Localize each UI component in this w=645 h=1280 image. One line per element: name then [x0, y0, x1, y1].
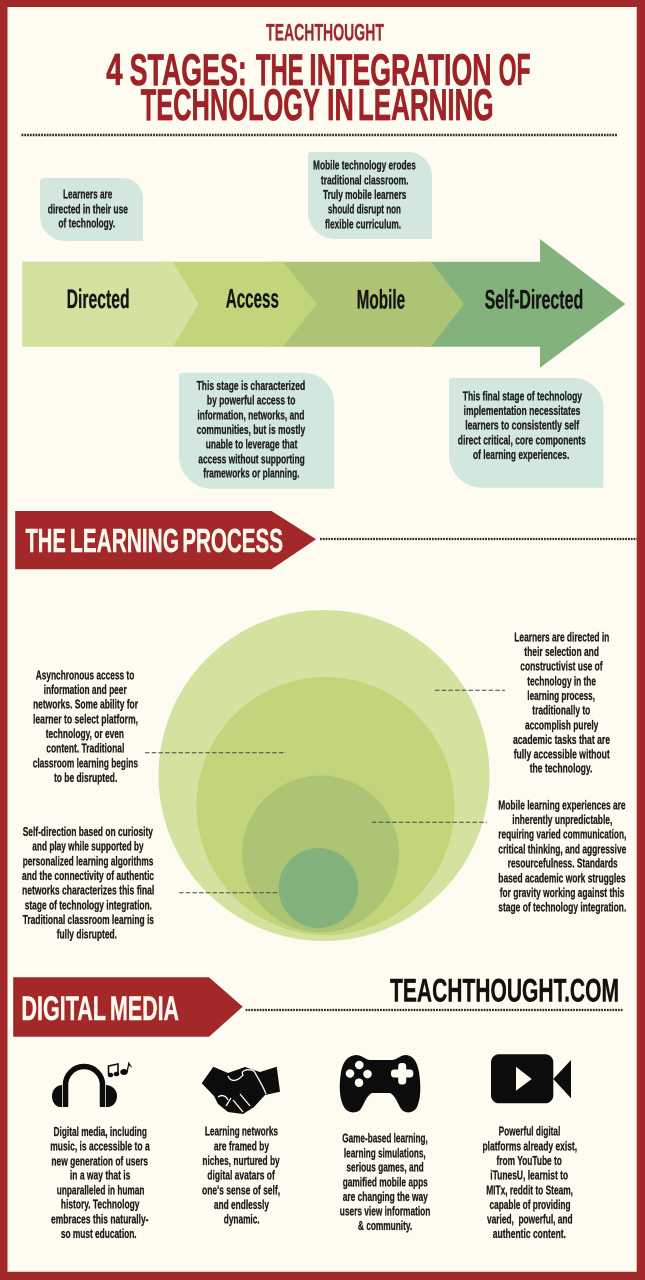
text: asynchronous access: technology, or even [46, 727, 124, 741]
callout: directed [40, 178, 143, 241]
text: asynchronous access: Asynchronous access to [36, 668, 135, 682]
title [106, 46, 531, 130]
text: learners directed: the technology. [530, 762, 592, 776]
text: mobile learning [498, 798, 626, 915]
callout: mobile: traditional classroom. [321, 173, 408, 187]
text: learners directed: technology in the [527, 674, 596, 688]
text: self-direction: and play while supported by [32, 840, 144, 854]
text: digital platforms: authentic content. [493, 1227, 566, 1241]
text: self-direction: personalized learning algorithms [23, 854, 153, 868]
text: self-direction: networks characterizes this final [22, 884, 154, 898]
text: learners directed: learning process, [527, 689, 595, 703]
callout: self-directed: learners to consistently self [465, 419, 580, 433]
text: digital platforms [482, 1125, 577, 1241]
circle: access [196, 677, 454, 935]
section banner: digital media [13, 977, 243, 1037]
text: learning networks [202, 1125, 280, 1226]
callout: access: information, networks, and [197, 408, 304, 422]
text: digital media [50, 1125, 150, 1241]
title: LEARNING [358, 81, 494, 130]
stage labels: Mobile [357, 285, 405, 315]
text: self-direction: and the connectivity of authentic [22, 869, 154, 883]
callout: mobile: Truly mobile learners [323, 188, 406, 202]
callout: access: frameworks or planning. [203, 467, 300, 481]
text: learning networks: are framed by [214, 1139, 269, 1153]
circle: mobile [242, 776, 399, 932]
title: OF [499, 46, 531, 95]
callout: directed: of technology. [58, 217, 115, 231]
title: 4 [106, 46, 123, 95]
text: digital platforms: capable of providing [490, 1198, 570, 1212]
text: asynchronous access: learner to select platform, [33, 712, 138, 726]
text: digital media: in a way that is [70, 1169, 130, 1183]
text: learners directed: accomplish purely [525, 718, 598, 732]
text: digital media: new generation of users [51, 1154, 148, 1168]
callout: self-directed: of learning experiences. [473, 448, 569, 462]
text: digital platforms: Powerful digital [499, 1125, 560, 1139]
text: game-based learning: users view information [340, 1204, 430, 1218]
text: digital media: Digital media, including [54, 1125, 147, 1139]
callout: access: communities, but is mostly [197, 423, 305, 437]
title: TECHNOLOGY [141, 81, 320, 130]
callout: self-directed [449, 378, 604, 488]
text: learners directed: their selection and [524, 645, 599, 659]
text: digital media: unparalleled in human [57, 1183, 144, 1197]
arrow segment: mobile [270, 262, 464, 347]
text: digital platforms: varied, powerful, and [487, 1212, 573, 1226]
arrow segment: access [160, 262, 317, 347]
text: game-based learning: learning simulations, [344, 1146, 426, 1160]
stage arrow [22, 239, 625, 368]
text: learning networks: one's sense of self, [202, 1183, 280, 1197]
brand heading: TEACHTHOUGHT [266, 20, 384, 46]
text: asynchronous access: to be disrupted. [54, 771, 117, 785]
callout: access: This stage is characterized [197, 379, 305, 393]
text: asynchronous access [33, 668, 138, 785]
section banner: the learning process: THE [26, 522, 66, 559]
icon: video camera [491, 1054, 571, 1103]
section banner: digital media: MEDIA [110, 990, 179, 1028]
section banner: the learning process: LEARNING [70, 522, 179, 559]
text: game-based learning: gamified mobile apps [343, 1175, 428, 1189]
callout: self-directed: implementation necessitates [464, 404, 580, 418]
icon: game controller [340, 1055, 420, 1112]
text: learning networks: and endlessly [214, 1198, 269, 1212]
callout: mobile: flexible curriculum. [325, 217, 401, 231]
text: digital media: embraces this naturally- [51, 1212, 148, 1226]
callout: mobile: should disrupt non [328, 203, 401, 217]
text: digital media: history. Technology [61, 1198, 139, 1212]
text: digital media: music, is accessible to a [50, 1140, 150, 1154]
title: IN [327, 81, 354, 130]
text: asynchronous access: networks. Some ability for [33, 698, 138, 712]
text: asynchronous access: information and peer [44, 683, 127, 697]
text: learning networks: niches, nurtured by [202, 1154, 280, 1168]
text: digital platforms: from YouTube to [496, 1154, 562, 1168]
callout: access: access without supporting [198, 452, 305, 466]
text: self-direction: stage of technology integration. [25, 898, 152, 912]
text: digital media: so must education. [61, 1227, 137, 1241]
callout: access [179, 373, 334, 489]
callout: access: by powerful access to [207, 394, 296, 408]
text: digital platforms: iTunesU, learnist to [490, 1169, 568, 1183]
callout: self-directed: direct critical, core components [458, 433, 586, 447]
text: game-based learning: serious games, and [346, 1161, 424, 1175]
callout: directed: Learners are [63, 188, 112, 202]
arrow segment: directed [22, 262, 199, 347]
nested circles chart [158, 610, 490, 941]
callout: self-directed: This final stage of technology [463, 389, 582, 403]
callout: mobile [308, 152, 432, 239]
text: learners directed [513, 630, 610, 776]
text: learners directed: constructivist use of [520, 660, 603, 674]
title: THE [256, 46, 304, 95]
text: asynchronous access: content. Traditional [46, 742, 124, 756]
circle: self-directed [278, 848, 358, 928]
stage labels: Access [226, 284, 279, 314]
arrow segment: self-directed [420, 239, 625, 368]
callout: access: unable to leverage that [206, 438, 298, 452]
text: learning networks: Learning networks [205, 1125, 278, 1139]
title: INTEGRATION [309, 46, 492, 95]
text: self-direction [22, 825, 154, 942]
text: game-based learning: Game-based learning, [342, 1132, 428, 1146]
text: self-direction: fully disrupted. [57, 928, 117, 942]
text: asynchronous access: classroom learning begins [33, 756, 138, 770]
stage labels: Directed [67, 284, 130, 314]
text: self-direction: Self-direction based on curiosity [23, 825, 153, 839]
text: game-based learning [340, 1132, 430, 1233]
section banner: the learning process: PROCESS [182, 522, 283, 559]
icon: handshake [202, 1067, 280, 1114]
circle: directed [158, 610, 490, 941]
callout: mobile: Mobile technology erodes [313, 159, 416, 173]
callout: directed: directed in their use [48, 202, 128, 216]
text: learning networks: dynamic. [224, 1212, 260, 1226]
section banner: digital media: DIGITAL [21, 990, 106, 1028]
text: game-based learning: are changing the way [343, 1190, 428, 1204]
text: learners directed: traditionally to [532, 704, 591, 718]
icon: headphones with music notes [52, 1062, 132, 1107]
text: digital platforms: MITx, reddit to Steam, [486, 1183, 573, 1197]
section banner: the learning process [15, 511, 316, 569]
text: game-based learning: & community. [358, 1219, 412, 1233]
text: learning networks: digital avatars of [207, 1169, 275, 1183]
text: self-direction: Traditional classroom learning is [23, 913, 154, 927]
stage labels [67, 284, 583, 315]
title: STAGES: [130, 46, 247, 95]
text: digital platforms: platforms already exist, [482, 1139, 577, 1153]
